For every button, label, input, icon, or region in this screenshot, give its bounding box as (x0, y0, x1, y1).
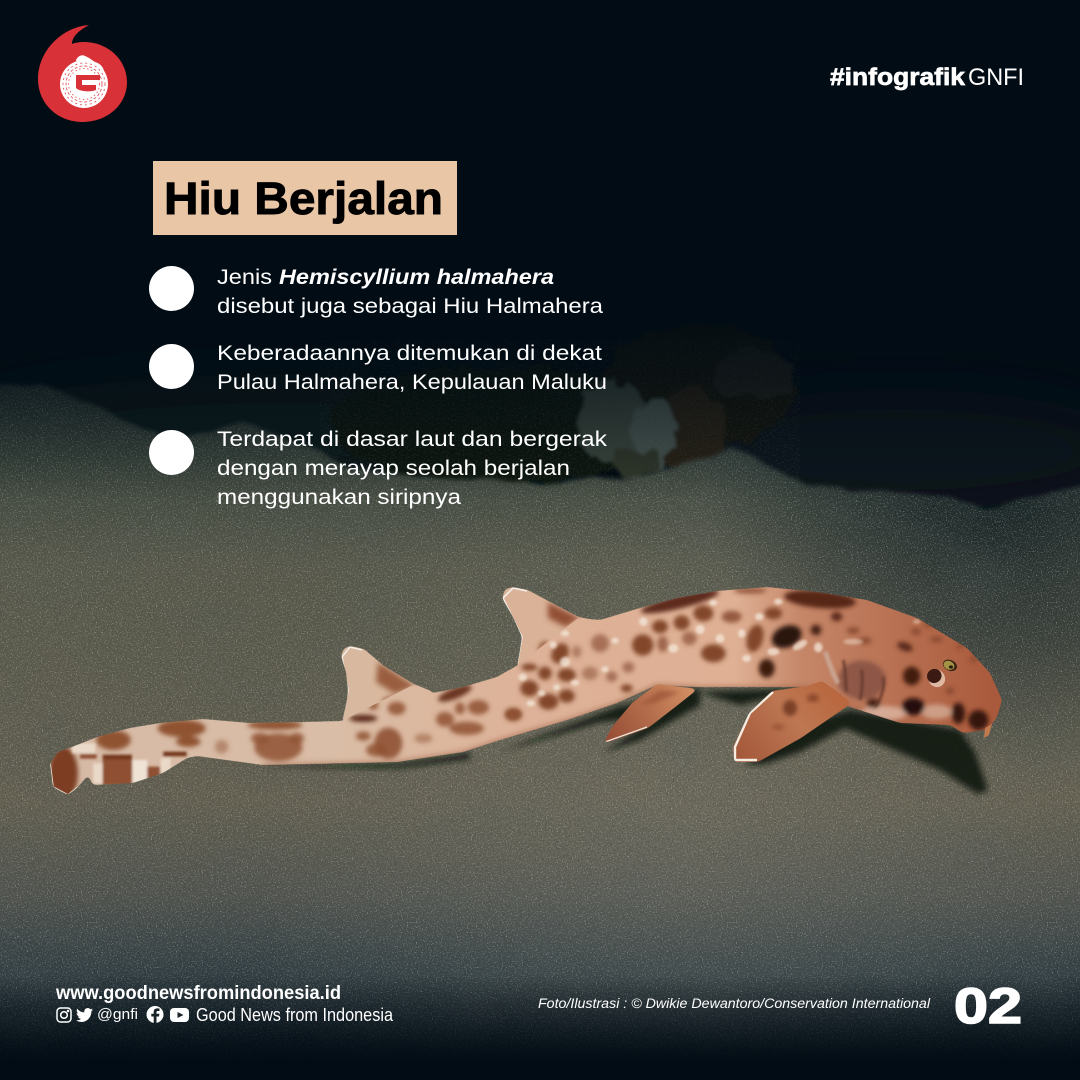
reef silhouette behind the dunes (0, 323, 1080, 510)
barbel (984, 724, 992, 738)
gill slits (825, 652, 884, 707)
bullet 3: dengan merayap seolah berjalan (217, 456, 570, 480)
underside shading (263, 688, 960, 768)
spiracle and eye (927, 660, 957, 688)
pectoral fin (733, 682, 850, 762)
hashtag label (830, 64, 1024, 91)
bullet 1 (149, 265, 603, 318)
shark body (40, 580, 1010, 800)
page number: 02 (954, 978, 1022, 1034)
website address: www.goodnewsfromindonesia.id (55, 983, 341, 1004)
icon: youtube (170, 1008, 189, 1022)
shark shadow on the sand (255, 688, 988, 794)
hashtag label: GNFI (968, 64, 1024, 91)
bullet 3 (149, 427, 607, 509)
shark (40, 580, 1010, 800)
logo: GNFI red mark with eagle emblem (38, 25, 127, 122)
bullet 3: Terdapat di dasar laut dan bergerak (217, 427, 607, 451)
icon: twitter (76, 1008, 93, 1022)
social row (57, 1005, 394, 1025)
page name: Good News from Indonesia (196, 1005, 394, 1025)
first dorsal fin (342, 646, 432, 720)
pelvic fin (606, 684, 695, 742)
title box (153, 161, 457, 235)
background: underwater seabed photo (0, 340, 1080, 1054)
photo credit: Foto/Ilustrasi : © Dwikie Dewantoro/Conservation International (538, 996, 931, 1011)
bullet 2: Keberadaannya ditemukan di dekat (217, 341, 602, 365)
hashtag label: #infografik (830, 64, 966, 91)
sand dunes (0, 383, 1080, 1054)
tail bands and spots (49, 682, 521, 800)
bullet 1: Jenis (217, 265, 272, 289)
second dorsal fin (502, 587, 591, 665)
bullet 3: menggunakan siripnya (217, 485, 461, 509)
bullet 2: Pulau Halmahera, Kepulauan Maluku (217, 370, 607, 394)
bullet 1: Hemiscyllium halmahera (279, 265, 554, 289)
tail notch highlights (50, 763, 78, 795)
title box: Hiu Berjalan (164, 173, 443, 224)
pale flecks (518, 599, 920, 706)
icon: facebook (146, 1006, 164, 1023)
bullet 1: disebut juga sebagai Hiu Halmahera (217, 294, 603, 318)
icon: instagram (57, 1008, 71, 1022)
head and body spots (505, 586, 988, 730)
bullet 2 (149, 341, 607, 394)
lower tail lobe bars (72, 743, 187, 786)
handle: @gnfi (97, 1006, 138, 1023)
